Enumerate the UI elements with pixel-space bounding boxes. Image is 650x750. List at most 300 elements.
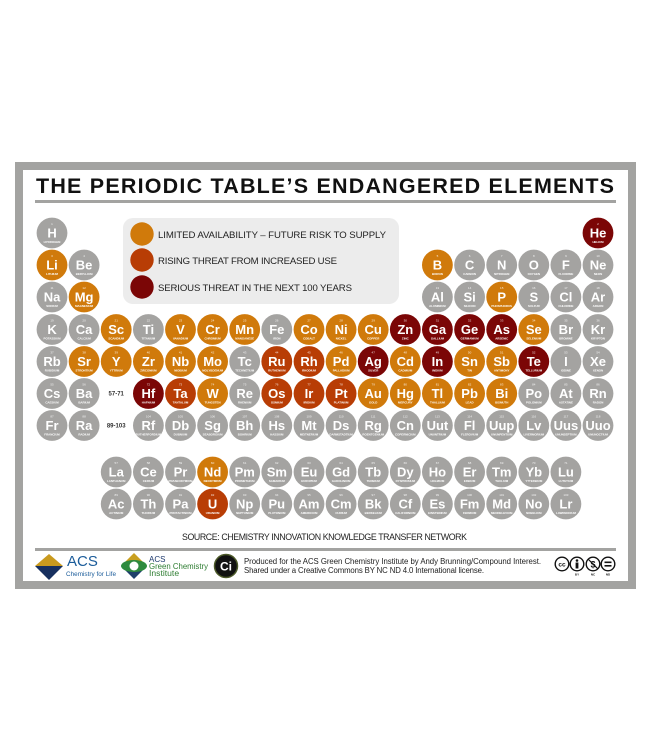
element: Dy: Dy [397, 464, 414, 480]
element: Ar: Ar [591, 290, 605, 304]
element: Cd: CADMIUM [398, 368, 413, 372]
element: Pb: Pb [461, 386, 478, 401]
element: Bk [358, 489, 389, 519]
element: S [518, 282, 549, 312]
element: Gd [326, 457, 356, 487]
element: Rf: 104 [146, 414, 151, 418]
element: Ge: 32 [468, 318, 472, 322]
element: Nd: Nd [204, 464, 221, 480]
element: Pd: 46 [339, 350, 343, 354]
element: Ds: 110 [339, 414, 344, 418]
element: Li: Li [46, 258, 58, 272]
element: B: 5 [437, 254, 439, 258]
element: Pt [326, 378, 356, 409]
element: P [486, 282, 517, 312]
element: Hg: 80 [404, 382, 407, 386]
element: In: INDIUM [432, 368, 443, 372]
element: Hg: Hg [397, 386, 414, 401]
element: Ti [133, 314, 164, 345]
element: No: No [525, 496, 543, 512]
element: Rn: 86 [596, 382, 600, 386]
element: Cf: CALIFORNIUM [395, 511, 416, 515]
element: Rh [294, 346, 324, 377]
element: Er [454, 457, 485, 487]
element: Fe: 26 [275, 318, 279, 322]
element: Bi: Bi [495, 386, 508, 401]
element: Hf: Hf [142, 386, 156, 401]
element: C [454, 250, 485, 280]
element: F: FLUORINE [559, 272, 573, 276]
element: Cr: CHROMIUM [204, 336, 221, 340]
element: Y [101, 346, 132, 377]
element: Ti: 22 [147, 318, 150, 322]
element: Re: 75 [243, 382, 247, 386]
element: Gd: Gd [332, 464, 350, 480]
legend item: limited availability [130, 222, 387, 246]
element: Zn: ZINC [402, 336, 410, 340]
element: Sr: 38 [82, 350, 86, 354]
element: Am: 95 [307, 493, 311, 497]
element: Pt: Pt [335, 386, 348, 401]
element: Ar: ARGON [593, 304, 603, 308]
element: Li: LITHIUM [46, 272, 58, 276]
element: Rg [358, 410, 389, 441]
element: Mn: Mn [235, 322, 254, 337]
element: H [37, 218, 67, 248]
element: Pu: Pu [268, 496, 285, 512]
element: Ca: 20 [82, 318, 86, 322]
element: Pr: PRASEODYMIUM [169, 479, 193, 483]
element: Au: GOLD [369, 400, 377, 404]
element: Cl: CHLORINE [558, 304, 574, 308]
element: P: P [497, 290, 506, 304]
element: Hg: MERCURY [398, 400, 413, 404]
footer rule [35, 548, 616, 551]
element: Sc [101, 314, 132, 345]
element: Pa: PROTACTINIUM [170, 511, 192, 515]
element: Pd: PALLADIUM [333, 368, 350, 372]
logo: ACS Green Chemistry Institute: ACS [149, 555, 165, 564]
logo: ACS Green Chemistry Institute: Green Chemistry [149, 561, 209, 571]
element: Th: THORIUM [142, 511, 156, 515]
element: Y: Y [112, 354, 121, 369]
legend item: serious threat: SERIOUS THREAT IN THE NEXT 100 YEARS [158, 283, 352, 294]
element: Hs: HASSIUM [270, 432, 284, 436]
element: Al [422, 282, 453, 312]
element: Uut: Uut [427, 418, 449, 433]
element: Cd: 48 [404, 350, 407, 354]
element: Pr: Pr [174, 464, 187, 480]
element: P: 15 [500, 286, 504, 290]
element: S: S [529, 290, 538, 304]
element: Cm [326, 489, 356, 519]
element: La: LANTHANUM [107, 479, 126, 483]
element: Co: 27 [307, 318, 311, 322]
element: Uuo: 118 [596, 414, 601, 418]
element: Tm: 69 [500, 461, 504, 465]
logo: ACS Chemistry for Life: Chemistry for Life [66, 571, 116, 578]
element: Md: MENDELEVIUM [491, 511, 513, 515]
element: Mg: 12 [82, 286, 86, 290]
element: Br: BROMINE [559, 336, 573, 340]
element: Sn: Sn [461, 354, 478, 369]
element: Bk: 97 [372, 493, 375, 497]
element: Np: Np [236, 496, 253, 512]
element: B: BORON [432, 272, 443, 276]
element: Nd: 60 [211, 461, 215, 465]
element: Zn: Zn [397, 322, 413, 337]
element: Co: COBALT [303, 336, 315, 340]
element: Ac: 89 [115, 493, 118, 497]
element: Si: SILICON [464, 304, 475, 308]
element: Fl: Fl [464, 418, 475, 433]
panel: legend [123, 218, 399, 304]
element: Pt: 78 [339, 382, 343, 386]
element: N: 7 [501, 254, 503, 258]
element: Dy: 66 [404, 461, 407, 465]
element: Sc: Sc [108, 322, 124, 337]
element: Ra: Ra [76, 418, 93, 433]
element: Cu: Cu [365, 322, 382, 337]
logo: Compound Interest [214, 554, 238, 578]
element: Md: 101 [499, 493, 505, 497]
element: Sr [69, 346, 100, 377]
element: Ce [133, 457, 164, 487]
element: Tl: THALLIUM [430, 400, 445, 404]
element: Cr: 24 [211, 318, 215, 322]
element: Ca [69, 314, 100, 345]
element: Si [454, 282, 485, 312]
element: Cm: 96 [339, 493, 343, 497]
element: Ra [69, 410, 100, 441]
element: Ds: Ds [333, 418, 349, 433]
element: Fr: FRANCIUM [44, 432, 60, 436]
element: Tm [486, 457, 517, 487]
element: I: I [564, 354, 568, 369]
element: Ar: 18 [596, 286, 600, 290]
element: Bi: BISMUTH [495, 400, 508, 404]
element: Ne: Ne [590, 258, 606, 272]
element: Nd [197, 457, 228, 487]
periodic table main grid [37, 218, 613, 441]
element: Cn: COPERNICIUM [395, 432, 416, 436]
element: Tl [422, 378, 453, 409]
element: Sn [454, 346, 485, 377]
element: Rg: Rg [365, 418, 382, 433]
element: Lu: 71 [564, 461, 568, 465]
element: Sc: SCANDIUM [108, 336, 125, 340]
element: K: 19 [50, 318, 54, 322]
element: Tc [229, 346, 260, 377]
element: Am [294, 489, 324, 519]
element: Rg: 111 [371, 414, 376, 418]
element: I: IODINE [561, 368, 571, 372]
element: C: CARBON [463, 272, 476, 276]
element: Pu: 94 [275, 493, 279, 497]
logo: ACS Green Chemistry Institute [121, 553, 209, 579]
element: Lr: 103 [563, 493, 569, 497]
element: U: U [208, 496, 217, 512]
element: Ir: 77 [307, 382, 311, 386]
legend item: serious threat [130, 275, 352, 299]
element: Bh: BOHRIUM [238, 432, 252, 436]
element: C: C [465, 258, 475, 272]
icon: NC: NC [591, 572, 596, 576]
element: Eu: EUROPIUM [301, 479, 317, 483]
element: Np: 93 [243, 493, 247, 497]
element: Pa [165, 489, 196, 519]
element: Hs [261, 410, 292, 441]
element: Ge: Ge [461, 322, 478, 337]
element: Uut [422, 410, 453, 441]
element: La: 57 [115, 461, 118, 465]
element: Re [229, 378, 260, 409]
element: Zr: ZIRCONIUM [140, 368, 157, 372]
element: Ho: Ho [429, 464, 446, 480]
element: Ba: Ba [76, 386, 93, 401]
element: Cu: COPPER [367, 336, 380, 340]
element: Rf [133, 410, 164, 441]
element: N: N [497, 258, 506, 272]
element: He [583, 218, 613, 248]
element: Os: OSMIUM [271, 400, 283, 404]
element: Ti: TITANIUM [142, 336, 156, 340]
element: Md: Md [492, 496, 511, 512]
element: Pb: 82 [468, 382, 472, 386]
element: Nb: 41 [179, 350, 182, 354]
element: Sb: Sb [493, 354, 510, 369]
element: Pa: Pa [173, 496, 189, 512]
element: Tl: 81 [436, 382, 439, 386]
element: Mn: 25 [243, 318, 247, 322]
element: Se: 34 [532, 318, 536, 322]
element: Zn: 30 [404, 318, 407, 322]
element: Ce: Ce [140, 464, 157, 480]
element: Er: 68 [468, 461, 472, 465]
element: H: 1 [51, 222, 53, 226]
element: Hf: 72 [147, 382, 150, 386]
element: Mo: Mo [203, 354, 222, 369]
element: Ca: CALCIUM [77, 336, 91, 340]
element: Cs [37, 378, 67, 409]
element: K: POTASSIUM [44, 336, 61, 340]
element: Ge [454, 314, 485, 345]
element: Mt: 109 [306, 414, 312, 418]
element: Ho [422, 457, 453, 487]
element: Po: Po [525, 386, 542, 401]
element: Mg [69, 282, 100, 312]
title rule [35, 200, 616, 203]
element: Pu: PLUTONIUM [268, 511, 286, 515]
element: Tb: TERBIUM [367, 479, 380, 483]
element: Fm: 100 [467, 493, 472, 497]
element: Sg: 106 [210, 414, 215, 418]
element: Sm: 62 [275, 461, 279, 465]
element: Rh: Rh [300, 354, 318, 369]
element: Cr: Cr [205, 322, 220, 337]
element: Ra: 88 [82, 414, 86, 418]
element: Fr [37, 410, 67, 441]
element: Ba: 56 [82, 382, 86, 386]
element: Be [69, 250, 100, 280]
element: Mo: MOLYBDENUM [202, 368, 224, 372]
element: In: 49 [436, 350, 439, 354]
icon: CC: cc [558, 562, 566, 568]
element: Kr [583, 314, 613, 345]
element: As: ARSENIC [495, 336, 509, 340]
element: Cl: 17 [564, 286, 568, 290]
element: Te: 52 [532, 350, 536, 354]
element: Xe [583, 346, 613, 377]
element: Na: Na [44, 290, 61, 304]
element: La [101, 457, 132, 487]
element: Ra: RADIUM [78, 432, 90, 436]
element: Db: Db [172, 418, 189, 433]
element: Hs: 108 [274, 414, 280, 418]
element: Ga [422, 314, 453, 345]
element: U [197, 489, 228, 519]
element: Ne: 10 [596, 254, 600, 258]
element: Sm [261, 457, 292, 487]
element: Bh: 107 [242, 414, 248, 418]
element: Yb [518, 457, 549, 487]
icon: ND: ND [606, 572, 611, 576]
element: W: 74 [211, 382, 215, 386]
element: Rb [37, 346, 67, 377]
element: Sb: ANTIMONY [494, 368, 509, 372]
element: Ni: NICKEL [336, 336, 347, 340]
element: Se: SELENIUM [526, 336, 542, 340]
element: Am: AMERICIUM [301, 511, 318, 515]
element: Lu [550, 457, 581, 487]
icon: NC [586, 557, 600, 576]
element: Cu: 29 [372, 318, 375, 322]
element: Zr: Zr [142, 354, 155, 369]
element: Ni [326, 314, 356, 345]
legend item: rising threat [130, 248, 337, 272]
element: Ce: CERIUM [143, 479, 155, 483]
element: Na [37, 282, 67, 312]
icon: NC: $ [590, 560, 596, 570]
element: Ge: GERMANIUM [461, 336, 479, 340]
element: Te [518, 346, 549, 377]
element: Po: POLONIUM [526, 400, 542, 404]
element: Th: 90 [147, 493, 150, 497]
element: Tc: 43 [243, 350, 247, 354]
element: Si: 14 [468, 286, 472, 290]
element: Sb: 51 [500, 350, 504, 354]
element: Sc: 21 [115, 318, 118, 322]
element: Te: TELLURIUM [525, 368, 543, 372]
element: V: 23 [179, 318, 182, 322]
element: Mg: MAGNESIUM [75, 304, 94, 308]
element: Os [261, 378, 292, 409]
element: Po: 84 [532, 382, 536, 386]
element: Mo [197, 346, 228, 377]
element: Es: 99 [436, 493, 439, 497]
logo: ACS Green Chemistry Institute: Institute [149, 568, 179, 578]
element: Es [422, 489, 453, 519]
element: Mt [294, 410, 324, 441]
element: Fe [261, 314, 292, 345]
element: Uup: 115 [499, 414, 504, 418]
element: Sr: STRONTIUM [76, 368, 93, 372]
element: Na: 11 [50, 286, 54, 290]
element: Br: Br [559, 322, 573, 337]
element: Mg: Mg [75, 290, 94, 304]
element: Am: Am [299, 496, 319, 512]
element: Tm: Tm [492, 464, 511, 480]
element: Eu [294, 457, 324, 487]
element: Cl [550, 282, 581, 312]
element: Ga: 31 [436, 318, 439, 322]
element: Gd: GADOLINIUM [332, 479, 351, 483]
element: Fm [454, 489, 485, 519]
element: Rb: Rb [43, 354, 61, 369]
element: Es: EINSTEINIUM [428, 511, 447, 515]
element: No: 102 [531, 493, 537, 497]
element: Te: Te [527, 354, 541, 369]
icon: BY: BY [575, 572, 579, 576]
element: Rn [583, 378, 613, 409]
element: At: 85 [564, 382, 568, 386]
element: Pb: LEAD [466, 400, 474, 404]
element: Sm: Sm [267, 464, 287, 480]
label: lanthanide range: 57-71 [109, 392, 125, 398]
element: Nb: NIOBIUM [174, 368, 187, 372]
element: Hf [133, 378, 164, 409]
element: Ta: 73 [179, 382, 182, 386]
element: Hg [390, 378, 421, 409]
element: Tc: Tc [238, 354, 252, 369]
panel: poster frame [19, 166, 632, 585]
element: Br: 35 [564, 318, 568, 322]
element: U: URANIUM [206, 511, 220, 515]
element: Fm: FERMIUM [463, 511, 477, 515]
element: Sg: Sg [204, 418, 221, 433]
element: Uup: UNUNPENTIUM [491, 432, 513, 436]
element: Ru: Ru [268, 354, 286, 369]
element: Ta: Ta [173, 386, 188, 401]
element: Ag: 47 [372, 350, 375, 354]
element: Fr: 87 [50, 414, 54, 418]
element: Db: 105 [178, 414, 183, 418]
element: K [37, 314, 67, 345]
element: Gd: 64 [339, 461, 343, 465]
element: Cn: Cn [397, 418, 414, 433]
element: Zr [133, 346, 164, 377]
element: I [550, 346, 581, 377]
element: U: 92 [211, 493, 215, 497]
element: As: As [493, 322, 510, 337]
element: In [422, 346, 453, 377]
element: Cn: 112 [403, 414, 408, 418]
element: Ce: 58 [147, 461, 150, 465]
element: Lr: Lr [559, 496, 572, 512]
element: Uuo: Uuo [585, 418, 611, 433]
element: Pm: PROMETHIUM [235, 479, 255, 483]
element: Nd: NEODYMIUM [204, 479, 222, 483]
element: Sr: Sr [77, 354, 91, 369]
element: Ru: RUTHENIUM [268, 368, 286, 372]
element: Os: 76 [275, 382, 279, 386]
element: Rb: 37 [50, 350, 54, 354]
element: W [197, 378, 228, 409]
element: Pb [454, 378, 485, 409]
element: Lr: LAWRENCIUM [556, 511, 576, 515]
element: Ho: HOLMIUM [430, 479, 445, 483]
element: Fm: Fm [460, 496, 479, 512]
